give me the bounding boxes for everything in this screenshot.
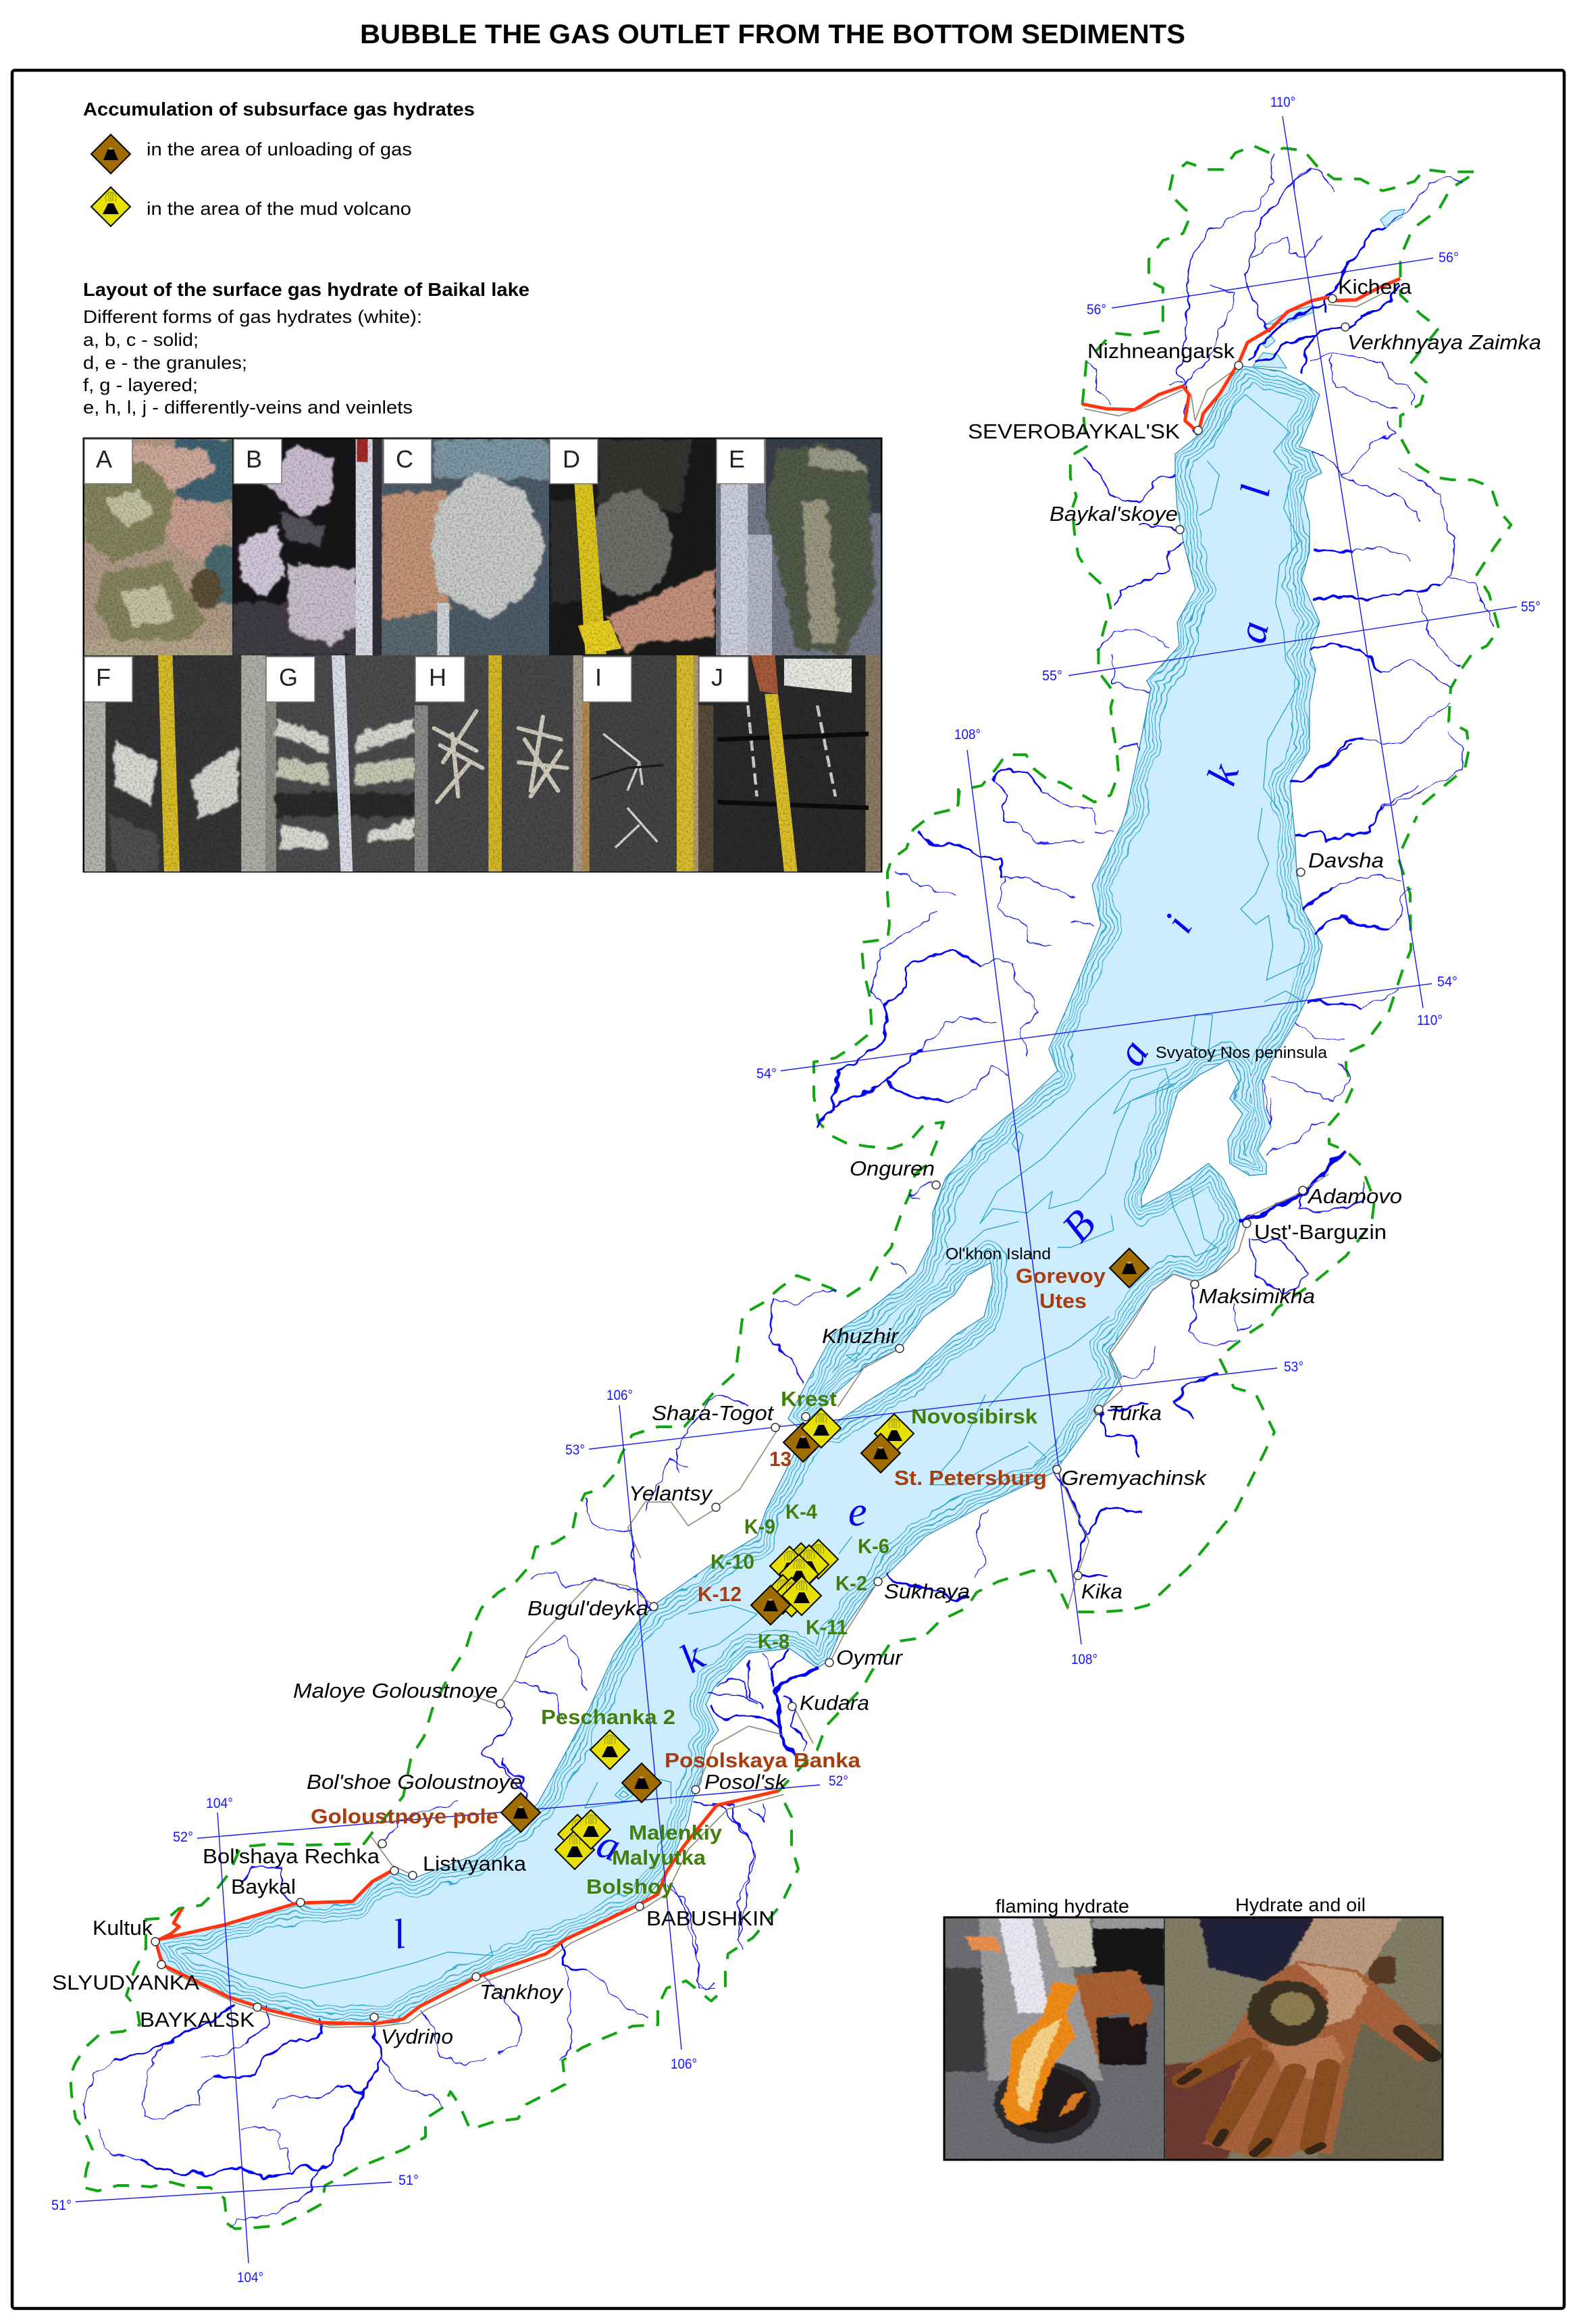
place names: Shara-Togot	[652, 1401, 774, 1425]
place names: Sukhaya	[884, 1580, 970, 1603]
photo H	[415, 655, 582, 872]
degree labels: 52°	[173, 1829, 193, 1845]
markers: gas unloading and mud volcano	[501, 1248, 1149, 1869]
text block: layout of surface gas hydrate	[83, 279, 529, 418]
degree labels: 108°	[1071, 1652, 1097, 1667]
lake name letters: B	[1054, 1201, 1105, 1251]
degree labels: 106°	[606, 1388, 633, 1403]
roads	[155, 278, 1400, 2027]
photo letter tags: C	[396, 445, 413, 473]
hydrate site names: K-9	[744, 1515, 775, 1538]
legend: accumulation of gas hydrates: in the area of unloading of gas	[147, 139, 412, 159]
caption: flaming hydrate: flaming hydrate	[996, 1896, 1129, 1917]
hydrate site names: Goloustnoye pole	[311, 1804, 498, 1828]
place names: Baykal	[231, 1875, 296, 1898]
photo texture overlay	[84, 439, 881, 871]
place names: Ust'-Barguzin	[1254, 1220, 1387, 1244]
place names: Khuzhir	[822, 1324, 900, 1348]
place names: BAYKALSK	[140, 2008, 255, 2031]
place names: Bol'shaya Rechka	[203, 1844, 380, 1868]
place names: Gremyachinsk	[1061, 1466, 1208, 1490]
place names: Ol'khon Island	[946, 1245, 1051, 1263]
photo C	[382, 439, 549, 655]
photo letter tags: H	[429, 663, 446, 691]
place names: Kichera	[1338, 275, 1412, 299]
hydrate site names: Novosibirsk	[911, 1405, 1038, 1428]
lake name letters: i	[1156, 907, 1201, 940]
photo A	[84, 439, 232, 655]
lake name letters: a	[1229, 617, 1278, 647]
place names: Adamovo	[1307, 1184, 1402, 1208]
degree labels: 104°	[237, 2270, 263, 2285]
photo B	[232, 439, 382, 655]
photo E	[716, 439, 881, 655]
photo J	[698, 655, 881, 872]
lake name letters: k	[1199, 758, 1248, 790]
hydrate site names: Malyutka	[612, 1846, 706, 1869]
text block: layout of surface gas hydrate: Different forms of gas hydrates (white):	[83, 307, 422, 327]
photo D	[549, 439, 716, 655]
legend: accumulation of gas hydrates	[83, 99, 475, 226]
hydrate site names: Utes	[1039, 1289, 1087, 1313]
hydrate site names: K-8	[758, 1630, 790, 1653]
hydrate site names: Bolshoy	[586, 1875, 674, 1898]
degree labels: 53°	[1284, 1359, 1303, 1375]
place names: Verkhnyaya Zaimka	[1347, 330, 1541, 354]
place names: Baykal'skoye	[1050, 502, 1178, 526]
photo letter tags: D	[563, 445, 580, 473]
lake name letters: l	[1233, 482, 1279, 500]
place names: Davsha	[1308, 849, 1384, 872]
degree labels: 104°	[206, 1796, 233, 1811]
place names: BABUSHKIN	[646, 1906, 775, 1930]
hydrate site names: Malenkiy	[629, 1821, 723, 1844]
lake name letters	[390, 482, 1279, 1959]
place names: Maloye Goloustnoye	[293, 1679, 498, 1702]
text block: layout of surface gas hydrate: e, h, l, j - differently-veins and veinlets	[83, 397, 413, 418]
photo letter tags: A	[96, 445, 112, 473]
place names: Vydrino	[381, 2025, 453, 2048]
photo G	[265, 655, 415, 872]
hydrate site names	[311, 1264, 1106, 1898]
photo letter tags: J	[711, 663, 723, 691]
photo pair texture and frame	[944, 1917, 1443, 2160]
hydrate site names: K-10	[710, 1550, 754, 1573]
place names: Kika	[1081, 1580, 1122, 1603]
place names: Svyatoy Nos peninsula	[1156, 1044, 1328, 1062]
degree labels: 51°	[398, 2173, 419, 2188]
photo letter tags: E	[729, 445, 745, 473]
degree labels: 108°	[954, 727, 981, 742]
photo: flaming hydrate	[944, 1917, 1165, 2159]
degree labels: 106°	[671, 2056, 697, 2072]
photo letter tags: I	[595, 663, 602, 691]
place names: Bugul'deyka	[527, 1596, 648, 1620]
place names: Onguren	[850, 1157, 935, 1180]
lake water with depth contours	[155, 209, 1405, 2025]
place names: Tankhoy	[480, 1980, 565, 2004]
place names	[52, 275, 1541, 2048]
rivers	[84, 153, 1495, 2227]
place names: Yelantsy	[629, 1482, 714, 1505]
degree labels: 55°	[1042, 668, 1062, 684]
lake name letters: l	[390, 1911, 409, 1959]
degree labels: 56°	[1439, 250, 1459, 266]
degree labels: 56°	[1087, 302, 1106, 318]
place names: Oymur	[836, 1646, 904, 1669]
legend: accumulation of gas hydrates: in the area of the mud volcano	[147, 199, 411, 219]
photo letter tags: G	[279, 663, 298, 691]
degree labels: 110°	[1417, 1013, 1443, 1028]
degree labels: 54°	[756, 1066, 777, 1082]
text block: layout of surface gas hydrate: d, e - the granules;	[83, 353, 247, 373]
text block: layout of surface gas hydrate: f, g - layered;	[83, 375, 198, 395]
hydrate site names: Krest	[781, 1387, 837, 1411]
hydrate site names: St. Petersburg	[894, 1466, 1047, 1490]
place names: Kudara	[800, 1691, 869, 1715]
hydrate site names: K-4	[785, 1500, 818, 1523]
degree labels: 54°	[1437, 974, 1457, 990]
text block: layout of surface gas hydrate: Layout of the surface gas hydrate of Baikal lake	[83, 279, 529, 300]
text block: layout of surface gas hydrate: a, b, c - solid;	[83, 330, 199, 350]
hydrate site names: Peschanka 2	[541, 1705, 675, 1729]
photo I	[582, 655, 698, 872]
photo letter tags: F	[96, 663, 111, 691]
hydrate site names: K-2	[835, 1571, 867, 1595]
lake name letters: e	[848, 1489, 867, 1535]
place names: Kultuk	[93, 1916, 153, 1940]
lake name letters: a	[591, 1820, 627, 1871]
settlements	[151, 295, 1349, 2021]
hydrate site names: K-11	[806, 1615, 848, 1639]
degree labels: 55°	[1521, 599, 1541, 615]
caption: hydrate and oil: Hydrate and oil	[1235, 1894, 1366, 1915]
degree labels: 52°	[829, 1773, 848, 1789]
hydrate site names: Gorevoy	[1016, 1264, 1106, 1288]
photo panel: gas hydrate forms A-J	[84, 438, 881, 872]
place names: Turka	[1108, 1401, 1162, 1425]
place names: Listvyanka	[423, 1852, 527, 1875]
place names: Nizhneangarsk	[1087, 339, 1235, 363]
legend: accumulation of gas hydrates: Accumulation of subsurface gas hydrates	[83, 99, 475, 120]
hydrate site names: K-6	[858, 1534, 889, 1558]
hydrate site names: Posolskaya Banka	[665, 1748, 861, 1772]
lake name letters: a	[1108, 1032, 1158, 1073]
hydrate site names: 13	[769, 1447, 792, 1471]
lake name letters: k	[672, 1633, 713, 1682]
title: BUBBLE THE GAS OUTLET FROM THE BOTTOM SEDIMENTS	[360, 20, 1185, 49]
degree labels: 53°	[565, 1442, 585, 1458]
hydrate site names: K-12	[698, 1582, 742, 1606]
place names: Maksimikha	[1199, 1284, 1315, 1308]
place names: SEVEROBAYKAL'SK	[968, 420, 1180, 443]
place names: Posol'sk	[704, 1770, 787, 1794]
photo letter tags: B	[246, 445, 262, 473]
photo F	[84, 655, 265, 872]
photo: hydrate and oil	[1164, 1917, 1443, 2159]
degree labels: 110°	[1270, 95, 1295, 110]
degree labels: 51°	[51, 2198, 72, 2213]
place names: SLYUDYANKA	[52, 1971, 199, 1994]
photo letter tags	[84, 439, 765, 702]
place names: Bol'shoe Goloustnoye	[307, 1770, 522, 1794]
